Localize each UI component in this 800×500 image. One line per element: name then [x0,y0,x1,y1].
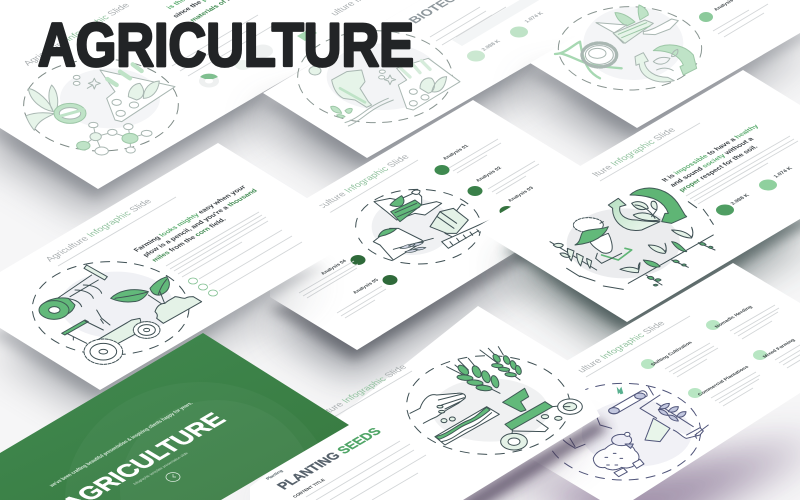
title: AGRICULTURE [38,11,414,79]
heading PLANTING SEEDS: PLANTING SEEDS [273,425,385,492]
illustration: wheat, hand, seeder [407,347,582,454]
stat 2.988 K [716,193,751,216]
stat 1.074 K: 1.074 K [524,11,545,24]
illustration: hand, plant and flask [298,31,460,126]
analysis items left: Analysis 05 [352,278,381,295]
icon: scroll circle [166,472,180,482]
stat 1.074 K [510,11,545,38]
analysis items right [434,139,572,216]
pale text box [452,0,546,46]
subtitle [600,123,700,181]
panel: green cover slide [0,333,349,500]
illustration: sheep, belt, wheat [546,383,708,480]
stat 2.988 K: 2.988 K [730,193,751,206]
small label: Planting [265,469,284,481]
item: Nomadic Herding: Nomadic Herding [714,305,754,329]
illustration: recycle, farmer, crops [550,188,715,289]
subtitle [58,197,176,266]
illustration: harvester, books, sack, wheat [356,189,490,264]
slide title: ulture Infographic Slide [574,319,667,374]
slide title: Agriculture Infographic Slide [42,197,154,263]
panel: recycle and farmer slide right [475,70,800,348]
stat 2.988 K: 2.988 K [481,39,502,52]
stat icons [199,28,317,88]
heading quote: and sound society without a [669,136,756,188]
panel: biotech slide top centre [255,0,657,184]
heading quote: proper respect for the soil. [678,144,760,193]
stat 2.988 K [467,39,502,62]
check list [188,230,302,296]
analysis items right: Analysis 03 [507,186,536,203]
subtitle [586,316,690,377]
body text [686,136,798,204]
panel: sheep slide bottom right [500,263,800,500]
slide heading [166,0,239,23]
body lines [713,4,768,37]
slide title: lture Infographic Slide [589,126,678,178]
panel: biotech slide top left [0,0,420,215]
illustration: biotech circle [24,59,178,155]
analysis items left: Analysis 04 [320,259,349,276]
slide title: culture Infographic Slide [314,153,411,210]
item: Commercial Plantations [688,365,760,406]
stat 1.074 K [759,166,794,190]
item: Mixed Farming: Mixed Farming [762,338,797,359]
heading quote: plow is a pencil, and you're a thousand [142,188,259,258]
item: Commercial Plantations: Commercial Plantations [697,365,751,397]
subtitle [326,160,418,215]
analysis item icon [699,12,713,22]
illustration: tractor, roller and plant [32,262,202,364]
item: Mixed Farming [753,338,800,368]
heading quote: miles from the corn field. [151,217,228,263]
analysis items right: Analysis 02 [475,166,504,183]
subtitle [334,371,412,417]
body text [166,212,268,277]
slide title: ture Infographic Slide [322,363,409,414]
panel: planting seeds slide [244,306,608,500]
illustration: DNA, gear, recycle [555,5,702,90]
content title: CONTENT TITLE [292,478,326,499]
heading quote: It is impossible to have a healthy [661,124,761,183]
body text lines [172,15,274,76]
stat 1.074 K: 1.074 K [773,166,794,179]
analysis items left [299,255,398,318]
item: Shifting Cultivation: Shifting Cultivation [650,341,694,367]
panel: analysis slide centre [264,100,600,376]
body lines [306,441,426,500]
cover tagline: we've been crafting beautiful presentation & inspiring clients happy for years. [48,401,195,488]
panel: farming slide left [0,143,365,414]
decorative circles [120,400,304,500]
cover sub text: Infographic template presentation slide [132,451,190,486]
panel: recycling slide top right [522,0,800,154]
slide title: Agriculture Infographic Slide [20,1,132,67]
heading quote: Farming looks mighty easy when your [133,185,248,253]
item: Shifting Cultivation [641,341,718,377]
body lines [430,7,506,45]
analysis items right: Analysis 01 [442,144,471,161]
item: Nomadic Herding [706,305,779,339]
